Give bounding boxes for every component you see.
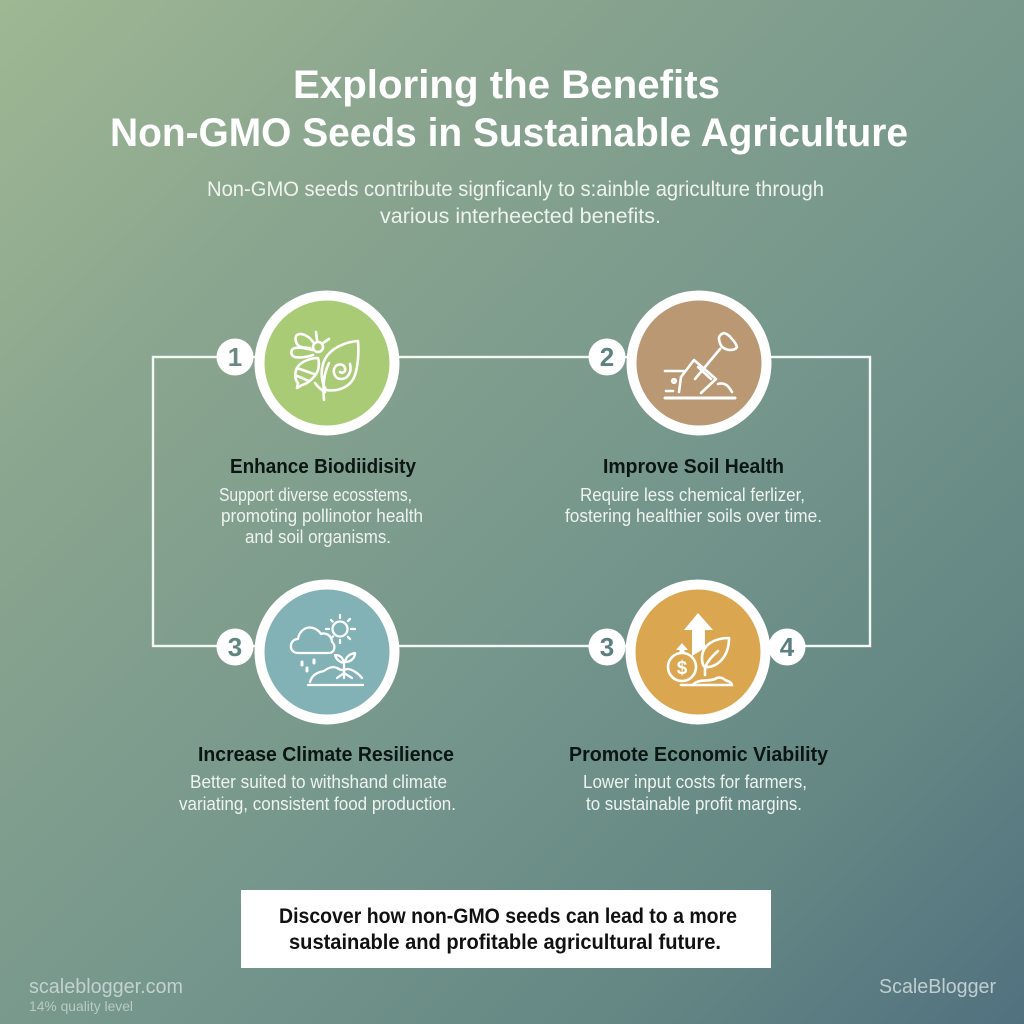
- title: [110, 63, 908, 155]
- text block: enhance biodiversity: [219, 456, 423, 547]
- text block: promote economic viability: Promote Economic Viability: [569, 744, 829, 766]
- icon: shovel in soil: [665, 333, 737, 398]
- text block: improve soil health: fostering healthier soils over time.: [565, 506, 822, 526]
- text block: enhance biodiversity: promoting pollinotor health: [221, 506, 423, 526]
- number badge 4: [768, 628, 806, 666]
- circle 1: [260, 296, 394, 430]
- number badge 3 right: [588, 628, 626, 666]
- number badge 1: [216, 338, 254, 376]
- text block: promote economic viability: to sustainable profit margins.: [586, 794, 802, 814]
- text block: improve soil health: Improve Soil Health: [603, 456, 784, 478]
- connector loop: [153, 357, 870, 646]
- text block: enhance biodiversity: and soil organisms.: [245, 527, 391, 547]
- footer right: brand: ScaleBlogger: [879, 976, 996, 998]
- call to action box: [241, 890, 771, 968]
- title: Non-GMO Seeds in Sustainable Agriculture: [110, 111, 908, 155]
- text block: enhance biodiversity: Enhance Biodiidisity: [230, 456, 417, 478]
- circle 2: [632, 296, 766, 430]
- footer left: website: 14% quality level: [29, 998, 133, 1014]
- title: Exploring the Benefits: [293, 63, 720, 107]
- step 4: economic viability: 4: [780, 632, 795, 662]
- step 2: soil health: 2: [600, 342, 614, 372]
- step 3: climate resilience: 3: [228, 632, 242, 662]
- icon: arrow, coin and leaf: [668, 613, 732, 685]
- step 1: biodiversity: 1: [228, 342, 242, 372]
- icon: cloud, sun and sprout: [291, 615, 363, 685]
- subtitle: [207, 178, 824, 228]
- subtitle: various interheected benefits.: [380, 205, 661, 228]
- text block: increase climate resilience: Better suited to withshand climate: [190, 772, 447, 792]
- text block: increase climate resilience: variating, consistent food production.: [179, 794, 456, 814]
- call to action box: sustainable and profitable agricultural future.: [289, 931, 721, 954]
- step 2: soil health: [588, 296, 766, 430]
- number badge 3 left: [216, 628, 254, 666]
- subtitle: Non-GMO seeds contribute signficanly to s:ainble agriculture through: [207, 178, 824, 201]
- footer left: website: [29, 976, 183, 1014]
- text block: promote economic viability: [569, 744, 829, 814]
- text block: enhance biodiversity: Support diverse ecosstems,: [219, 485, 412, 505]
- text block: increase climate resilience: Increase Climate Resilience: [198, 744, 454, 766]
- dollar sign: $: [677, 658, 688, 679]
- text block: promote economic viability: Lower input costs for farmers,: [583, 772, 807, 792]
- number badge 2: [588, 338, 626, 376]
- icon: bee and leaf: [291, 332, 358, 400]
- circle 3: [260, 584, 394, 720]
- step 4: economic viability: 3: [600, 632, 614, 662]
- footer left: website: scaleblogger.com: [29, 976, 183, 998]
- text block: increase climate resilience: [179, 744, 456, 814]
- step 1: biodiversity: [216, 296, 394, 430]
- call to action box: Discover how non-GMO seeds can lead to a more: [279, 905, 737, 928]
- text block: improve soil health: Require less chemical ferlizer,: [580, 485, 805, 505]
- step 4: economic viability: [588, 584, 806, 720]
- text block: improve soil health: [565, 456, 822, 526]
- step 3: climate resilience: [216, 584, 394, 720]
- circle 4: [630, 584, 766, 720]
